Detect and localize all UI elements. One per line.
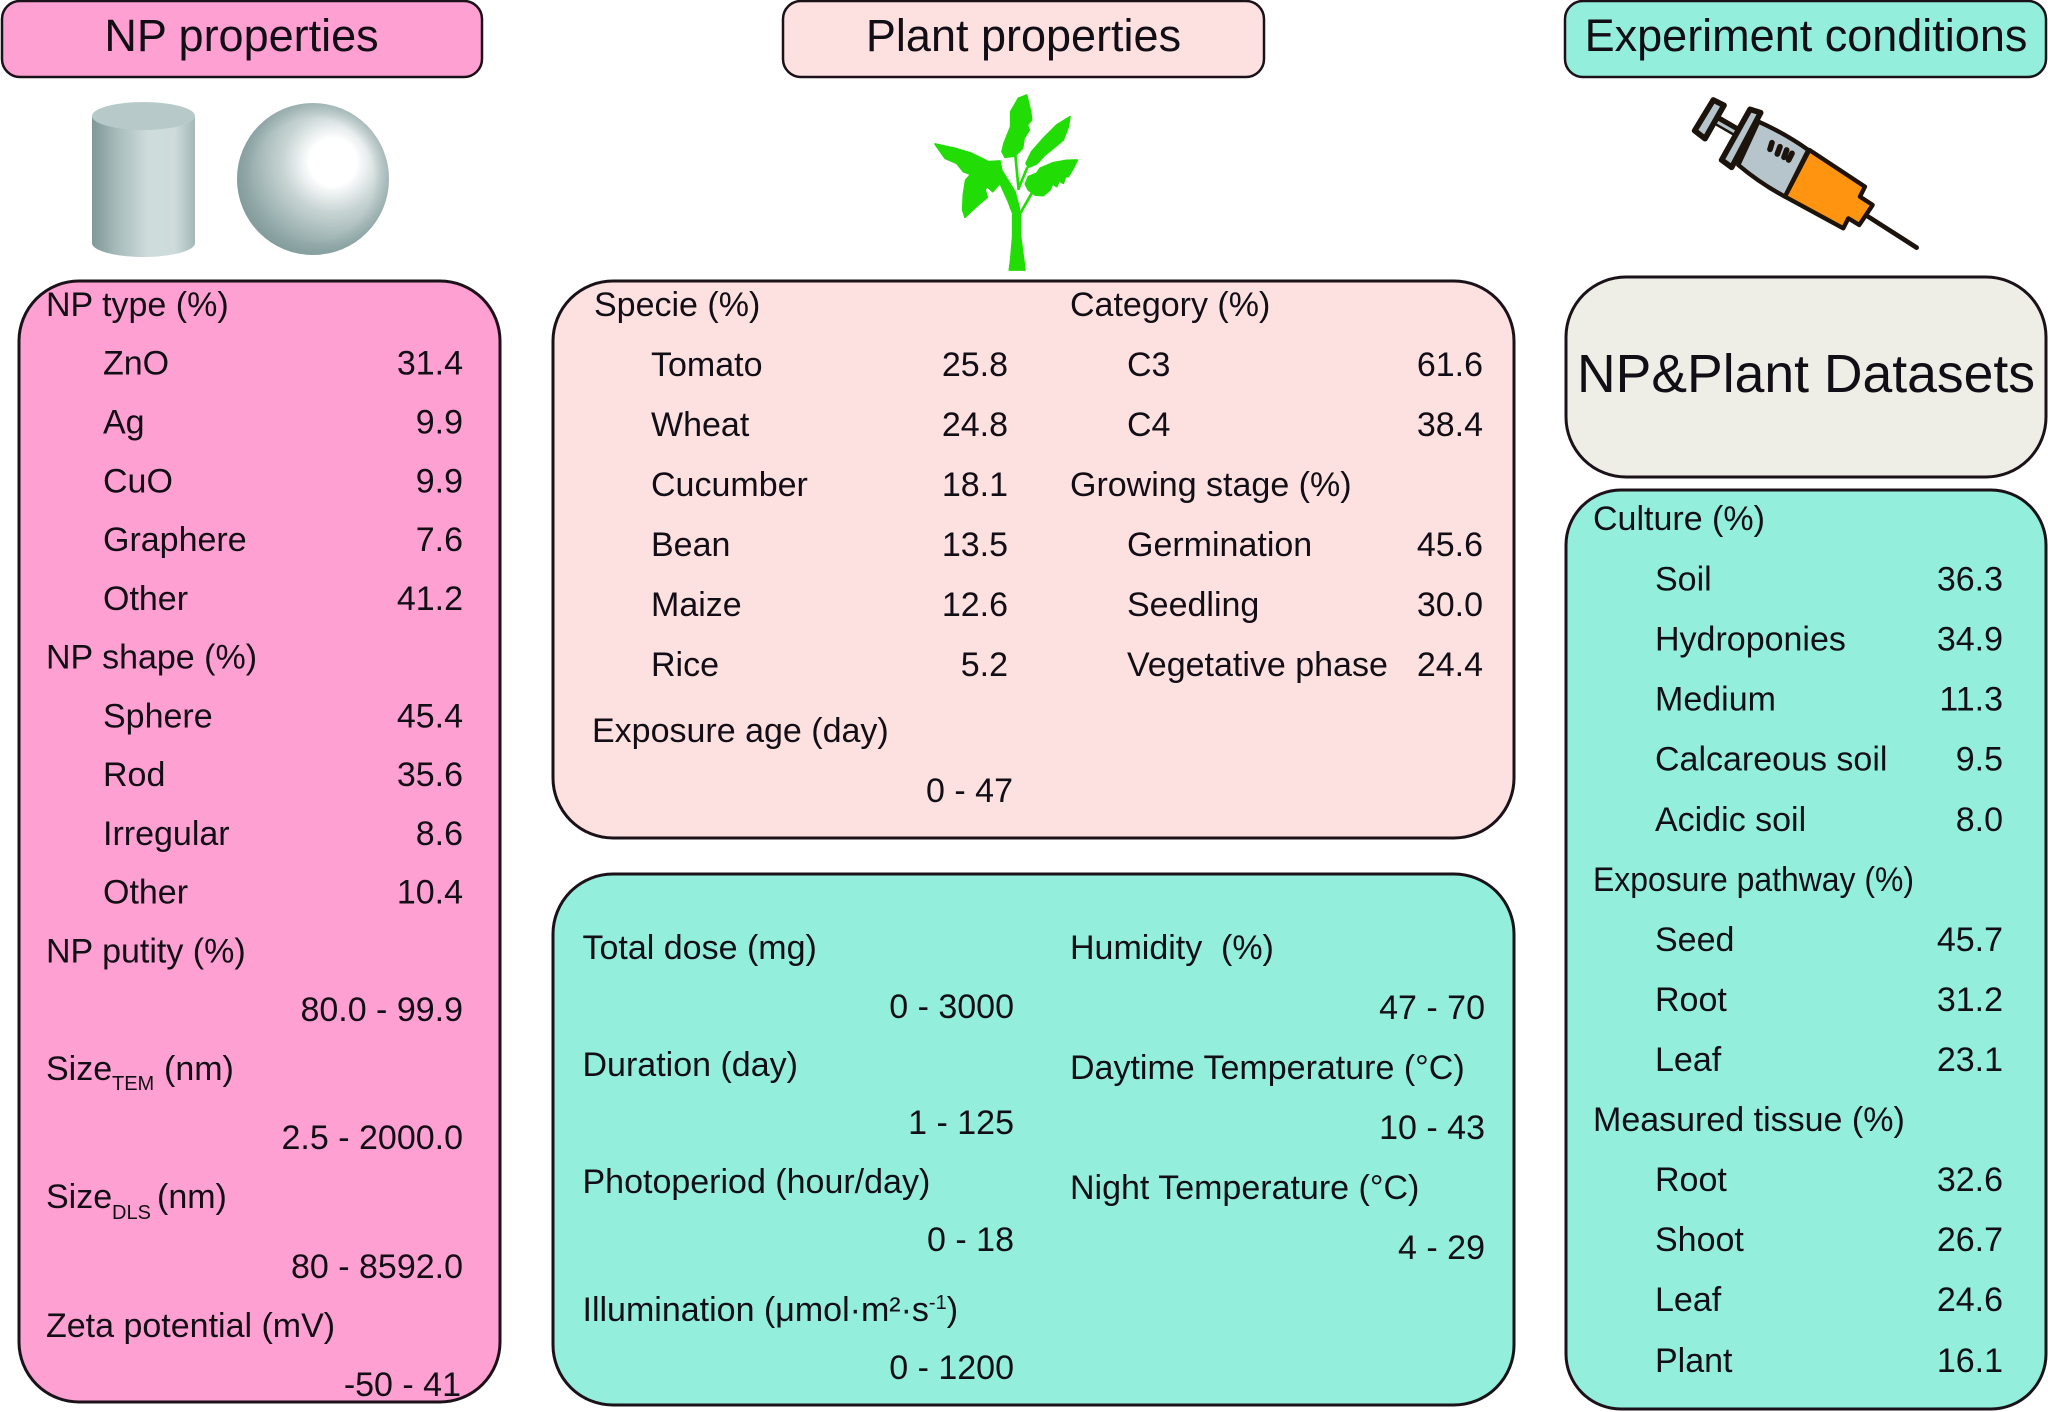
species list: 24.8 xyxy=(942,406,1008,444)
humidity range: 47 - 70 xyxy=(1379,989,1485,1027)
callout: NP&Plant Datasets xyxy=(1566,277,2046,477)
panel: NP properties xyxy=(19,281,500,1404)
icon: plant xyxy=(935,95,1077,270)
category list xyxy=(1070,286,1483,444)
night temperature range xyxy=(1070,1169,1485,1267)
NP type list: Ag xyxy=(103,404,145,442)
callout: NP&Plant Datasets: NP&Plant Datasets xyxy=(1577,345,2035,404)
species list: 13.5 xyxy=(942,526,1008,564)
NP shape list: Other xyxy=(103,874,188,912)
header: NP properties xyxy=(2,1,482,77)
DLS size range: Size xyxy=(46,1178,112,1216)
zeta potential range: -50 - 41 xyxy=(344,1366,461,1404)
exposure pathway list: 45.7 xyxy=(1937,921,2003,959)
exposure pathway list xyxy=(1593,861,2003,1079)
species list: Tomato xyxy=(651,346,762,384)
culture list: Medium xyxy=(1655,680,1776,718)
measured tissue list: 24.6 xyxy=(1937,1281,2003,1319)
growing stage list: Seedling xyxy=(1127,586,1259,624)
growing stage list xyxy=(1070,466,1483,684)
category list: 61.6 xyxy=(1417,346,1483,384)
NP type list: 9.9 xyxy=(416,462,463,500)
duration range: Duration (day) xyxy=(582,1046,798,1084)
measured tissue list: Leaf xyxy=(1655,1281,1722,1319)
duration range xyxy=(582,1046,1014,1142)
zeta potential range: Zeta potential (mV) xyxy=(46,1307,335,1345)
measured tissue list: Shoot xyxy=(1655,1221,1744,1259)
species list: Maize xyxy=(651,586,742,624)
illumination range: -1 xyxy=(929,1292,947,1314)
species list: Bean xyxy=(651,526,730,564)
measured tissue list: Plant xyxy=(1655,1342,1733,1380)
panel: experiment settings xyxy=(553,874,1514,1405)
TEM size range: Size xyxy=(46,1050,112,1088)
species list: 25.8 xyxy=(942,346,1008,384)
species list: Rice xyxy=(651,646,719,684)
NP shape list: Irregular xyxy=(103,815,230,853)
NP type list: 41.2 xyxy=(397,580,463,618)
NP shape list: 8.6 xyxy=(416,815,463,853)
TEM size range: (nm) xyxy=(164,1050,234,1088)
measured tissue list: Measured tissue (%) xyxy=(1593,1101,1905,1139)
species list: 18.1 xyxy=(942,466,1008,504)
NP shape list: Sphere xyxy=(103,698,213,736)
humidity range: (%) xyxy=(1221,929,1274,967)
NP type list: ZnO xyxy=(103,344,169,382)
culture list: Soil xyxy=(1655,560,1712,598)
NP type list: Graphere xyxy=(103,521,247,559)
NP shape list: Rod xyxy=(103,756,165,794)
exposure pathway list: Seed xyxy=(1655,921,1734,959)
exposure age range: Exposure age (day) xyxy=(592,712,889,750)
exposure pathway list: Exposure pathway (%) xyxy=(1593,861,1914,899)
measured tissue list: 32.6 xyxy=(1937,1161,2003,1199)
exposure pathway list: 23.1 xyxy=(1937,1041,2003,1079)
NP purity range xyxy=(46,932,463,1029)
NP type list: NP type (%) xyxy=(46,286,229,324)
culture list xyxy=(1593,500,2003,839)
zeta potential range xyxy=(46,1307,461,1404)
NP type list: 7.6 xyxy=(416,521,463,559)
species list: Cucumber xyxy=(651,466,808,504)
culture list: 34.9 xyxy=(1937,620,2003,658)
duration range: 1 - 125 xyxy=(908,1104,1014,1142)
culture list: Acidic soil xyxy=(1655,801,1806,839)
exposure age range xyxy=(592,712,1013,810)
illumination range xyxy=(582,1291,1014,1387)
NP shape list: 45.4 xyxy=(397,698,463,736)
growing stage list: 45.6 xyxy=(1417,526,1483,564)
daytime temperature range xyxy=(1070,1049,1485,1147)
DLS size range xyxy=(46,1178,463,1286)
species list: Specie (%) xyxy=(594,286,760,324)
icon: sphere nanoparticle xyxy=(237,103,389,255)
photoperiod range xyxy=(582,1163,1014,1259)
growing stage list: Germination xyxy=(1127,526,1312,564)
TEM size range xyxy=(46,1050,463,1157)
TEM size range: TEM xyxy=(112,1073,154,1095)
night temperature range: 4 - 29 xyxy=(1398,1229,1485,1267)
measured tissue list xyxy=(1593,1101,2003,1380)
panel: plant properties xyxy=(553,281,1514,838)
panel: experiment conditions xyxy=(1566,490,2046,1409)
DLS size range: 80 - 8592.0 xyxy=(291,1248,463,1286)
icon: syringe xyxy=(1695,100,1917,248)
photoperiod range: 0 - 18 xyxy=(927,1221,1014,1259)
NP shape list: 10.4 xyxy=(397,874,463,912)
growing stage list: Growing stage (%) xyxy=(1070,466,1352,504)
night temperature range: Night Temperature (°C) xyxy=(1070,1169,1419,1207)
growing stage list: 24.4 xyxy=(1417,646,1483,684)
humidity range: Humidity xyxy=(1070,929,1202,967)
header: Plant properties xyxy=(783,1,1264,77)
total dose range: Total dose (mg) xyxy=(582,929,817,967)
exposure age range: 0 - 47 xyxy=(926,772,1013,810)
NP type list xyxy=(46,286,463,618)
measured tissue list: Root xyxy=(1655,1161,1727,1199)
NP purity range: 80.0 - 99.9 xyxy=(300,991,463,1029)
NP type list: Other xyxy=(103,580,188,618)
measured tissue list: 16.1 xyxy=(1937,1342,2003,1380)
daytime temperature range: Daytime Temperature (°C) xyxy=(1070,1049,1465,1087)
category list: C3 xyxy=(1127,346,1170,384)
illumination range: ) xyxy=(947,1291,958,1329)
exposure pathway list: Root xyxy=(1655,981,1727,1019)
growing stage list: 30.0 xyxy=(1417,586,1483,624)
total dose range: 0 - 3000 xyxy=(889,988,1014,1026)
category list: Category (%) xyxy=(1070,286,1270,324)
TEM size range: 2.5 - 2000.0 xyxy=(282,1119,463,1157)
species list: 12.6 xyxy=(942,586,1008,624)
humidity range xyxy=(1070,929,1485,1027)
header: Plant properties: Plant properties xyxy=(866,10,1181,61)
category list: 38.4 xyxy=(1417,406,1483,444)
exposure pathway list: 31.2 xyxy=(1937,981,2003,1019)
category list: C4 xyxy=(1127,406,1170,444)
icon: cylinder nanoparticle xyxy=(92,102,195,257)
NP type list: 31.4 xyxy=(397,344,463,382)
NP type list: CuO xyxy=(103,462,173,500)
illumination range: 0 - 1200 xyxy=(889,1349,1014,1387)
NP shape list: NP shape (%) xyxy=(46,638,257,676)
DLS size range: (nm) xyxy=(157,1178,227,1216)
measured tissue list: 26.7 xyxy=(1937,1221,2003,1259)
header: Experiment conditions xyxy=(1565,1,2046,77)
photoperiod range: Photoperiod (hour/day) xyxy=(582,1163,930,1201)
header: Experiment conditions: Experiment conditions xyxy=(1585,10,2027,61)
culture list: Calcareous soil xyxy=(1655,740,1887,778)
NP shape list xyxy=(46,638,463,912)
NP type list: 9.9 xyxy=(416,404,463,442)
exposure pathway list: Leaf xyxy=(1655,1041,1722,1079)
culture list: 8.0 xyxy=(1956,801,2003,839)
NP shape list: 35.6 xyxy=(397,756,463,794)
culture list: Culture (%) xyxy=(1593,500,1765,538)
species list: 5.2 xyxy=(961,646,1008,684)
total dose range xyxy=(582,929,1014,1026)
culture list: 11.3 xyxy=(1939,680,2003,718)
culture list: 9.5 xyxy=(1956,740,2003,778)
NP purity range: NP putity (%) xyxy=(46,932,246,970)
growing stage list: Vegetative phase xyxy=(1127,646,1388,684)
daytime temperature range: 10 - 43 xyxy=(1379,1109,1485,1147)
species list xyxy=(594,286,1008,684)
culture list: Hydroponies xyxy=(1655,620,1846,658)
DLS size range: DLS xyxy=(112,1202,151,1224)
species list: Wheat xyxy=(651,406,750,444)
culture list: 36.3 xyxy=(1937,560,2003,598)
header: NP properties: NP properties xyxy=(104,10,379,61)
illumination range: Illumination (μmol·m²·s xyxy=(582,1291,929,1329)
